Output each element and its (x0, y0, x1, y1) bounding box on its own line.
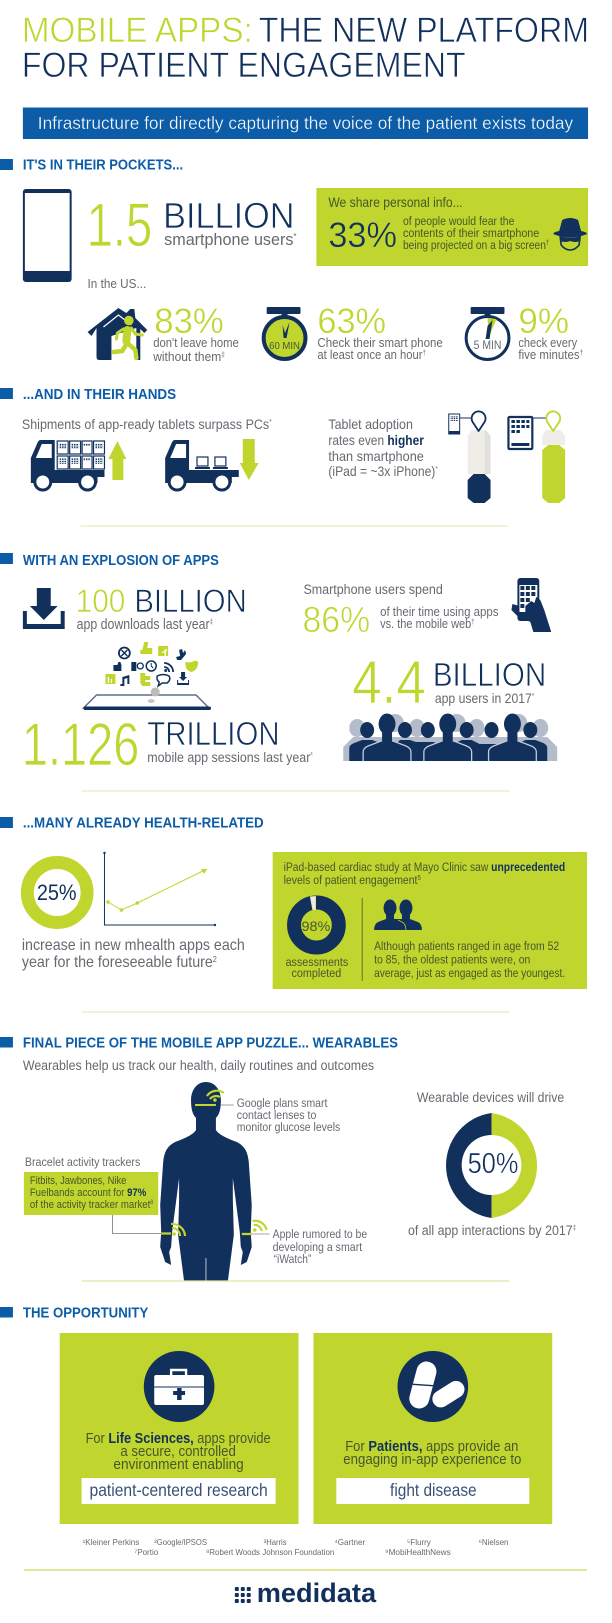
stat: 1.5 billion smartphone users: smartphone users (164, 231, 295, 249)
title: THE NEW PLATFORM (259, 11, 589, 50)
panel: Mayo Clinic study: 5 (417, 875, 421, 882)
section heading: wearables: FINAL PIECE OF THE MOBILE APP PUZZLE... WEARABLES (23, 1034, 398, 1052)
icon: medical briefcase (144, 1351, 214, 1422)
text: tablet adoption: (iPad = ~3x iPhone) (328, 464, 447, 479)
footnotes: ⁹MobiHealthNews (385, 1548, 451, 1557)
arrow: down (240, 439, 259, 480)
callout: bracelet activity trackers (24, 1155, 161, 1234)
subtitle banner: Infrastructure for directly capturing the voice of the patient exists today (38, 113, 573, 133)
section heading: explosion of apps: WITH AN EXPLOSION OF APPS (23, 552, 219, 569)
stat: 100 billion: 100 (76, 583, 125, 619)
callout: bracelet activity trackers: Fitbits, Jawbones, Nike (30, 1175, 126, 1187)
stat: 4.4 billion app users: 4.4 (352, 649, 426, 716)
panel: we share personal info: of people would fear the (403, 214, 515, 228)
stat: 1.5 billion smartphone users: * (293, 232, 297, 241)
panel: Mayo Clinic study: average, just as engaged as the youngest. (374, 966, 565, 980)
icon: person leaving house (88, 308, 147, 360)
chart: 50 percent donut: ‡ (573, 1225, 576, 1232)
chart: 98 percent donut: 98% (301, 918, 330, 934)
panel: we share personal info (316, 188, 588, 266)
stat: 9 percent: 9% (518, 302, 569, 341)
stat: 86 percent time in apps: † (471, 619, 475, 626)
text: shipments: * (269, 419, 272, 426)
stat: 1.5 billion smartphone users: BILLION (163, 195, 295, 236)
footnotes: ⁸Robert Woods Johnson Foundation (206, 1548, 334, 1557)
stat: 1.5 billion smartphone users: 1.5 (87, 191, 152, 259)
section heading: in their hands: ...AND IN THEIR HANDS (23, 386, 176, 403)
section heading: health-related: ...MANY ALREADY HEALTH-RELATED (23, 814, 264, 832)
icon: spy (553, 218, 587, 250)
callout: bracelet activity trackers: Fuelbands account for 97% (30, 1187, 146, 1199)
text: mhealth increase (22, 937, 245, 971)
icon: stopwatch 5 min: 5 MIN (474, 340, 501, 352)
footnotes: ⁷Portio (134, 1548, 159, 1557)
stat: 100 billion: BILLION (134, 583, 247, 619)
chart: 50 percent donut: 50% (468, 1148, 518, 1180)
footnotes: ¹Kleiner Perkins (83, 1538, 139, 1547)
title: MOBILE APPS: (22, 11, 253, 50)
icon: tablet launching apps (84, 688, 211, 710)
panel: we share personal info: being projected on a big screen (403, 238, 570, 252)
stat: 100 billion (76, 583, 247, 633)
stat: 63 percent: Check their smart phone (317, 335, 443, 350)
stat: 9 percent: check every (518, 335, 578, 350)
icon: stopwatch 60 min: 60 MIN (269, 341, 300, 352)
chart: 50 percent donut (408, 1089, 576, 1238)
icon: two people (374, 900, 422, 930)
stat: 4.4 billion app users: BILLION (433, 656, 546, 693)
title (22, 11, 589, 85)
stat: 86 percent time in apps: 86% (302, 599, 370, 640)
stat: 9 percent: † (580, 350, 583, 357)
callout: Google contact lenses: monitor glucose levels (237, 1120, 340, 1134)
stat: 1.5 billion smartphone users (87, 191, 297, 259)
icon: pills (398, 1351, 468, 1422)
panel: life sciences: a secure, controlled (120, 1443, 236, 1460)
panel: life sciences (60, 1333, 299, 1524)
callout: Apple iWatch (252, 1227, 367, 1266)
arrow: up (108, 441, 126, 480)
icon: crowd of people (338, 714, 562, 765)
panel: Mayo Clinic study: levels of patient engagement (284, 873, 436, 887)
stat: 63 percent: at least once an hour (317, 347, 438, 362)
text: tablet adoption: Tablet adoption (328, 417, 413, 432)
stat: 1.126 trillion sessions: ³ (310, 752, 313, 759)
panel: life sciences: environment enabling (113, 1456, 244, 1473)
text: shipments: Shipments of app-ready tablets surpass PCs (22, 416, 297, 432)
panel: Mayo Clinic study: completed (292, 966, 341, 980)
callout: Apple iWatch: developing a smart (273, 1240, 363, 1254)
panel: we share personal info: † (546, 240, 549, 247)
logo: medidata: medidata (257, 1578, 377, 1608)
stat: 1.126 trillion sessions: 1.126 (22, 711, 139, 778)
illustration: human body with wearables (160, 1082, 267, 1281)
stat: 63 percent: 63% (317, 302, 386, 341)
text: mhealth increase: increase in new mhealth apps each (22, 937, 245, 954)
section heading: pockets: IT'S IN THEIR POCKETS... (23, 156, 183, 174)
icon: truck carrying tablets (31, 440, 104, 490)
stat: 1.126 trillion sessions: TRILLION (147, 715, 280, 752)
callout: Google contact lenses: Google plans smart (237, 1096, 328, 1110)
panel: Mayo Clinic study: to 85, the oldest patients were, on (374, 952, 530, 967)
stat: 4.4 billion app users: * (532, 693, 535, 700)
footnotes: ⁵Flurry (407, 1538, 431, 1547)
callout: Apple iWatch: “iWatch” (274, 1252, 311, 1266)
stat: 83 percent: 83% (154, 302, 224, 341)
stat: 86 percent time in apps: Smartphone users spend (303, 581, 443, 597)
text: in the US: In the US... (88, 276, 146, 291)
panel: we share personal info: 33% (328, 216, 397, 255)
chart: 50 percent donut: of all app interactions by 2017 (408, 1222, 593, 1238)
footnotes: ²Google/IPSOS (154, 1538, 207, 1547)
stat: 83 percent (88, 302, 239, 364)
section heading: the opportunity: THE OPPORTUNITY (23, 1304, 148, 1322)
text: wearables intro: Wearables help us track our health, daily routines and outcomes (23, 1057, 374, 1073)
text: tablet adoption: than smartphone (328, 449, 424, 464)
stat: 100 billion: app downloads last year (77, 617, 232, 633)
callout: bracelet activity trackers: of the activity tracker market (30, 1199, 167, 1211)
panel: Mayo Clinic study: assessments (286, 955, 348, 969)
chart: tablet adoption bar (508, 411, 565, 503)
stat: 83 percent: don't leave home (153, 335, 239, 350)
stat: 9 percent (466, 302, 583, 362)
stat: 1.126 trillion sessions: mobile app sessions last year (147, 749, 330, 765)
stat: 86 percent time in apps: vs. the mobile web (380, 616, 487, 631)
panel: we share personal info: We share personal info... (328, 195, 463, 210)
text: tablet adoption: * (435, 466, 438, 473)
chart: 25 percent ring (27, 862, 87, 922)
callout: bracelet activity trackers: 8 (150, 1200, 154, 1206)
stat: 83 percent: without them (153, 349, 226, 364)
panel: we share personal info: contents of their smartphone (403, 226, 540, 240)
stat: 9 percent: five minutes (518, 347, 587, 362)
chart: 50 percent donut: Wearable devices will drive (417, 1089, 564, 1105)
panel: patients: fight disease (390, 1480, 477, 1500)
callout: Google contact lenses (221, 1096, 340, 1134)
panel: Mayo Clinic study (273, 852, 587, 989)
stat: 63 percent (264, 302, 443, 362)
stat: 1.126 trillion sessions (22, 711, 313, 778)
panel: Mayo Clinic study: iPad-based cardiac study at Mayo Clinic saw unprecedented (284, 860, 565, 874)
icon: download (23, 588, 65, 629)
text: mhealth increase: year for the foreseeable future (22, 954, 228, 971)
panel: life sciences: For Life Sciences, apps provide (86, 1430, 271, 1447)
stat: 86 percent time in apps: of their time using apps (380, 604, 499, 619)
panel: patients: engaging in-app experience to (343, 1451, 521, 1468)
callout: Google contact lenses: contact lenses to (237, 1108, 317, 1122)
text: mhealth increase: 2 (213, 955, 217, 964)
title: FOR PATIENT ENGAGEMENT (22, 46, 466, 85)
footnotes (83, 1538, 508, 1557)
chart: growth line (103, 852, 216, 926)
panel: patients (313, 1333, 552, 1524)
icon: stopwatch 60 min (264, 307, 305, 359)
text: tablet adoption: rates even higher (328, 433, 425, 448)
stat: 63 percent: † (422, 350, 426, 357)
icons: app cluster above tablet (105, 642, 198, 686)
stat: 86 percent time in apps (302, 581, 499, 640)
chart: 98 percent donut (294, 896, 339, 948)
footnotes: ⁴Gartner (334, 1538, 366, 1547)
stat: 4.4 billion app users (352, 649, 546, 716)
footnotes: ³Harris (264, 1538, 287, 1547)
text: tablet adoption (328, 417, 438, 479)
icon: smartphone (23, 189, 72, 282)
callout: bracelet activity trackers: Bracelet activity trackers (25, 1155, 140, 1169)
panel: Mayo Clinic study: Although patients ranged in age from 52 (374, 939, 559, 953)
icon: hand holding phone (511, 578, 551, 632)
chart: smartphone adoption bar (449, 411, 491, 503)
chart: 25 percent ring: 25% (37, 880, 77, 905)
panel: patients: For Patients, apps provide an (345, 1438, 518, 1455)
stat: 83 percent: ‡ (221, 352, 225, 359)
callout: Apple iWatch: Apple rumored to be (273, 1227, 367, 1241)
footnotes: ⁶Nielsen (479, 1538, 508, 1547)
panel: life sciences: patient-centered research (90, 1480, 268, 1500)
stat: 4.4 billion app users: app users in 2017 (435, 691, 542, 706)
subtitle banner (23, 108, 588, 139)
icon: truck carrying laptops (165, 440, 239, 490)
stat: 100 billion: ‡ (210, 619, 213, 626)
